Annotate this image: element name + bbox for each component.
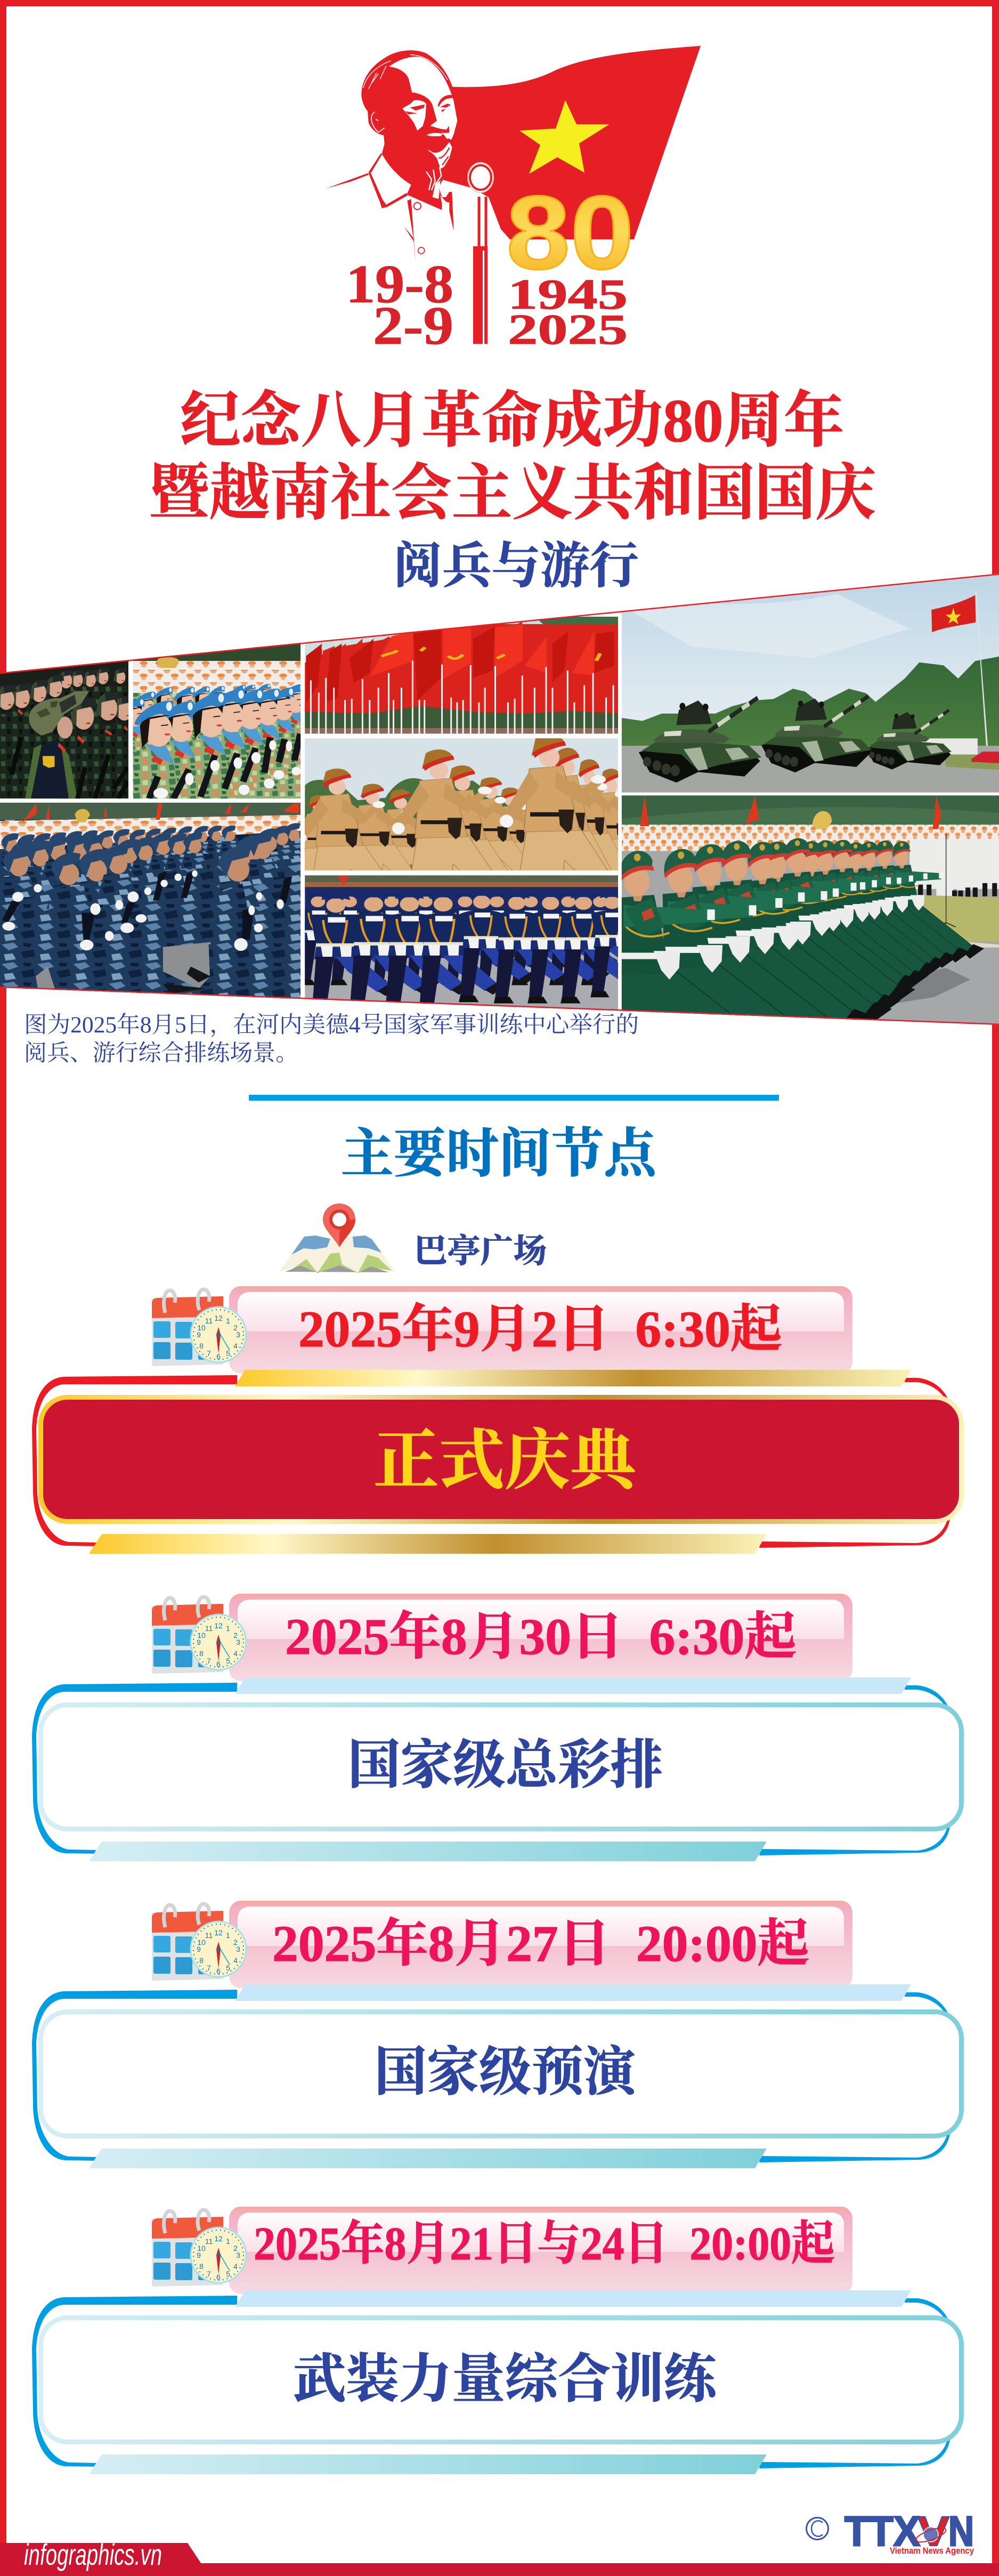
icon: calendar and clock: 6 <box>216 1352 221 1361</box>
logo number 80: 80 <box>506 174 634 291</box>
icon: calendar and clock: 8 <box>199 1342 204 1350</box>
icon: calendar and clock: 2 <box>233 2244 238 2252</box>
icon: calendar and clock: 3 <box>236 2251 240 2259</box>
date: 2025年8月21日与24日 20:00起 <box>254 2218 835 2270</box>
band top and bottom edges <box>0 574 999 1025</box>
logo dates: 1945 <box>508 271 628 318</box>
icon: calendar and clock: 4 <box>233 1956 238 1965</box>
date: 2025年8月27日 20:00起 <box>272 1915 809 1972</box>
photo: traffic police march in beige uniforms <box>305 738 618 870</box>
divider line <box>249 1095 779 1101</box>
photo: peacekeepers in blue berets <box>133 643 300 798</box>
icon: calendar and clock: 9 <box>197 1330 201 1339</box>
icon: calendar and clock: 9 <box>197 1945 201 1953</box>
date: 2025年9月2日 6:30起 <box>298 1301 782 1358</box>
gold bar top <box>235 1370 911 1386</box>
icon: calendar and clock <box>152 1904 246 1981</box>
footer bar <box>0 2538 999 2576</box>
icon: calendar and clock: 12 <box>214 1928 223 1937</box>
icon: calendar and clock: 3 <box>236 1638 240 1646</box>
light blue bar top <box>235 1677 911 1694</box>
ribbon frame <box>32 2296 950 2468</box>
icon: calendar and clock <box>152 2210 246 2287</box>
icon: calendar and clock: 12 <box>214 1621 223 1630</box>
logo: TTXVN: TTX <box>844 2507 920 2555</box>
icon: calendar and clock: 1 <box>226 1317 230 1325</box>
icon: calendar and clock: 11 <box>205 1624 213 1633</box>
icon: calendar and clock: 7 <box>207 1657 211 1665</box>
event box <box>40 1398 961 1521</box>
icon: calendar and clock: 11 <box>205 2237 213 2246</box>
event name: 武装力量综合训练 <box>293 2351 721 2409</box>
icon: map with pin <box>279 1204 395 1273</box>
location row <box>279 1204 547 1273</box>
logo dates: 2025 <box>508 306 628 353</box>
icon: calendar and clock: 1 <box>226 2237 230 2246</box>
teal bar bottom <box>89 1842 767 1861</box>
icon: calendar and clock: 10 <box>197 1323 206 1332</box>
panel: 2 September official ceremony <box>32 1286 961 1554</box>
icon: calendar and clock: 2 <box>233 1323 238 1332</box>
icon: red flag <box>442 46 701 239</box>
photo caption: 图为2025年8月5日，在河内美德4号国家军事训练中心举行的 <box>24 1012 639 1038</box>
icon: calendar and clock: 9 <box>197 1638 201 1646</box>
icon: calendar and clock: 3 <box>236 1945 240 1953</box>
light blue bar top <box>235 1984 911 2001</box>
icon: yellow star <box>519 100 610 174</box>
event box <box>40 2317 961 2442</box>
icon: calendar and clock: 4 <box>233 1342 238 1350</box>
icon: calendar and clock: 8 <box>199 1956 204 1965</box>
icon: calendar and clock: 1 <box>226 1931 230 1940</box>
photo: army march in green uniforms <box>621 795 999 1025</box>
photo: navy camouflage marching column <box>0 803 305 1006</box>
icon: calendar and clock: 7 <box>207 2270 211 2278</box>
logo: TTXVN: N <box>948 2507 974 2555</box>
date tab <box>229 1286 852 1374</box>
icon: portrait of Ho Chi Minh <box>326 50 457 263</box>
icon: calendar and clock <box>152 1597 246 1674</box>
panel: 27 August national rehearsal <box>32 1901 961 2168</box>
date tab <box>229 2207 852 2294</box>
icon: calendar and clock: 12 <box>214 1314 223 1322</box>
icon: calendar and clock: 11 <box>205 1931 213 1940</box>
ribbon frame <box>32 1990 950 2162</box>
icon: calendar and clock: 5 <box>226 1349 230 1358</box>
icon: microphone and pole <box>468 157 493 344</box>
icon: calendar and clock: 11 <box>205 1317 213 1325</box>
heading: key time points: 主要时间节点 <box>341 1125 660 1183</box>
title: 纪念八月革命成功80周年 <box>180 387 844 455</box>
icon: calendar and clock: 6 <box>216 1967 221 1975</box>
light blue bar top <box>235 2290 911 2307</box>
panel: photo collage band <box>0 574 999 1025</box>
icon: calendar and clock: 6 <box>216 1660 221 1668</box>
footer url: infographics.vn <box>24 2538 162 2571</box>
icon: calendar and clock: 8 <box>199 2262 204 2271</box>
gold bar bottom <box>89 1534 767 1554</box>
icon: calendar and clock: 7 <box>207 1349 211 1358</box>
panel: 21 and 24 August combined forces training <box>32 2207 961 2474</box>
icon: calendar and clock: 3 <box>236 1330 240 1339</box>
logo dates: 19-8 <box>346 254 453 314</box>
icon: calendar and clock: 4 <box>233 2262 238 2271</box>
title <box>149 387 876 527</box>
icon: calendar and clock: 1 <box>226 1624 230 1633</box>
icon: calendar and clock: 10 <box>197 1938 206 1947</box>
title: 暨越南社会主义共和国国庆 <box>149 459 876 527</box>
icon: calendar and clock: 7 <box>207 1964 211 1972</box>
venue label: 巴亭广场 <box>414 1233 547 1270</box>
date tab <box>229 1594 852 1681</box>
teal bar bottom <box>89 2454 767 2474</box>
icon: calendar and clock: 12 <box>214 2234 223 2243</box>
photo: tanks on parade <box>622 570 999 793</box>
panel: 30 August national general rehearsal <box>32 1594 961 1861</box>
event name: 国家级总彩排 <box>348 1737 663 1795</box>
logo: TTXVN: V <box>917 2507 949 2555</box>
logo: TTXVN <box>807 2507 974 2556</box>
icon: calendar and clock: 10 <box>197 2244 206 2252</box>
logo dates: 2-9 <box>373 296 453 356</box>
icon: calendar and clock: 10 <box>197 1631 206 1640</box>
icon: calendar and clock: 5 <box>226 1657 230 1665</box>
ribbon frame <box>32 1375 950 1548</box>
subtitle: 阅兵与游行 <box>393 539 639 593</box>
logo dates <box>346 254 628 356</box>
icon: calendar and clock: 5 <box>226 2270 230 2278</box>
logo: 80th anniversary emblem <box>326 46 701 344</box>
event name: 正式庆典 <box>373 1424 644 1497</box>
copyright mark <box>807 2518 828 2539</box>
icon: calendar and clock: 8 <box>199 1649 204 1658</box>
photo: field of red flags <box>305 617 618 733</box>
date tab <box>229 1901 852 1988</box>
teal bar bottom <box>89 2149 767 2168</box>
event name: 国家级预演 <box>375 2044 643 2102</box>
icon: calendar and clock: 2 <box>233 1631 238 1640</box>
icon: calendar and clock: 4 <box>233 1649 238 1658</box>
icon: calendar and clock: 5 <box>226 1964 230 1972</box>
photo caption: 阅兵、游行综合排练场景。 <box>24 1040 298 1066</box>
icon: calendar and clock: 9 <box>197 2251 201 2259</box>
icon: calendar and clock: 2 <box>233 1938 238 1947</box>
photo: soldiers in camouflage helmets <box>0 660 128 798</box>
event box <box>40 2012 961 2136</box>
event box <box>40 1705 961 1829</box>
icon: calendar and clock: 6 <box>216 2273 221 2281</box>
ribbon frame <box>32 1683 950 1855</box>
logo: TTXVN: Vietnam News Agency <box>890 2546 974 2556</box>
photo: naval parade in dark blue <box>305 875 618 1011</box>
date: 2025年8月30日 6:30起 <box>285 1608 797 1665</box>
photo caption <box>24 1012 639 1066</box>
icon: calendar and clock <box>152 1289 246 1366</box>
